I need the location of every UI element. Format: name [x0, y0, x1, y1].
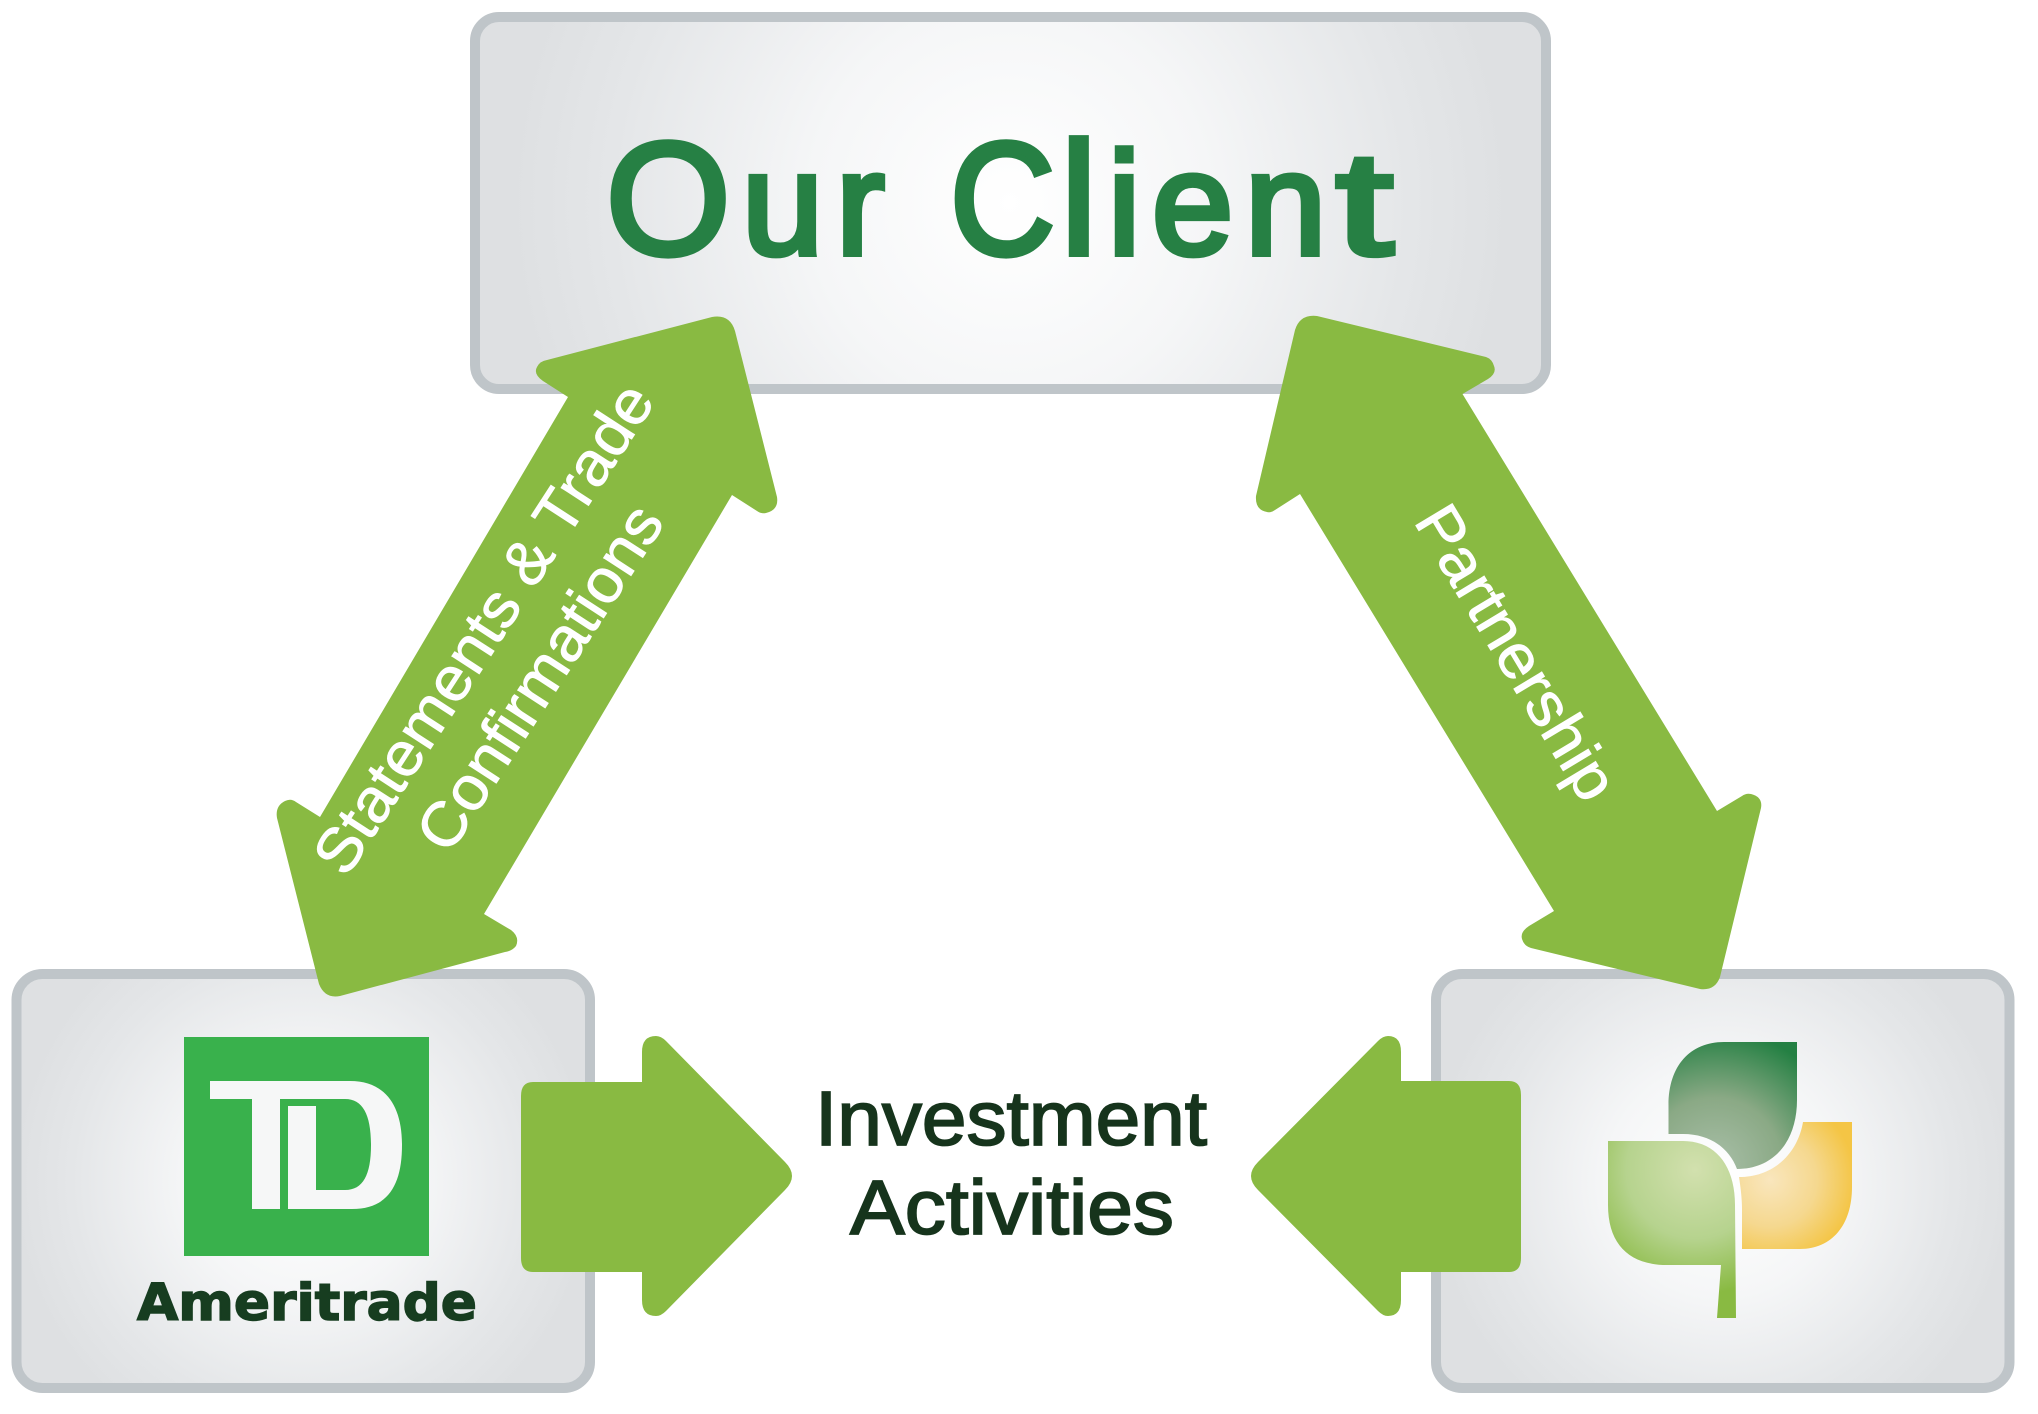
heading: Our Client: i [1108, 122, 1140, 285]
heading: Our Client: e [1152, 122, 1233, 285]
arrow: partnership double arrow [1256, 316, 1761, 989]
icon: light green leaf [1608, 1141, 1736, 1318]
text: Investment Activities: Investment [815, 1076, 1207, 1162]
arrow: right-pointing activity arrow [521, 1036, 792, 1316]
text: Investment Activities: Activities [850, 1165, 1174, 1251]
icon: yellow leaf [1739, 1122, 1852, 1249]
icon: TD logo [184, 1037, 429, 1256]
label: confirmations: Confirmations [403, 492, 678, 864]
heading: Our Client: O [606, 109, 730, 288]
heading: Our Client: u [742, 122, 823, 285]
heading: Our Client: t [1336, 122, 1393, 285]
heading: Our Client: C [950, 109, 1055, 288]
heading: Our Client: n [1245, 122, 1326, 285]
icon: leaf logo [1608, 1042, 1852, 1318]
heading: Our Client: r [836, 122, 885, 285]
icon: dark green leaf [1668, 1042, 1797, 1169]
arrow: statements double arrow [277, 317, 777, 996]
label: statements and trade: Statements & Trade [300, 371, 668, 887]
panel: partner firm [1436, 974, 2010, 1388]
arrow: left-pointing activity arrow [1251, 1036, 1521, 1316]
heading: Our Client: l [1061, 109, 1097, 288]
text: Investment Activities [815, 1076, 1207, 1251]
panel: Our Client [475, 17, 1546, 389]
panel: TD Ameritrade [16, 974, 590, 1388]
label: partnership: Partnership [1401, 493, 1631, 813]
text: Ameritrade: Ameritrade [137, 1274, 477, 1333]
